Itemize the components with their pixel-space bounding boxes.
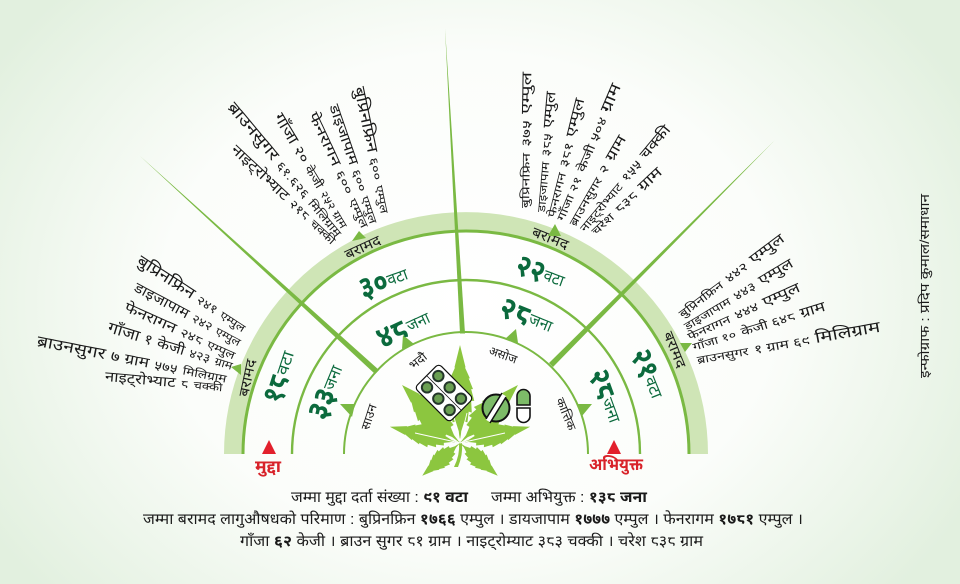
text block: upper-left seizures <box>223 85 395 249</box>
text block: upper-right seizures: ब्राउनसुगर २ ग्राम <box>564 131 630 229</box>
text block: upper-left seizures: डाइजापाम ६०० एम्पुल <box>325 101 382 226</box>
icon: round tablet <box>482 393 510 423</box>
text block: left seizures: नाइट्रोभ्याट ८ चक्की <box>104 368 224 396</box>
icon: cannabis leaf <box>387 345 533 483</box>
credit: इन्फोग्राफ : प्रदिप कुमाल/समाधान <box>917 193 933 378</box>
text block: right seizures <box>675 230 883 368</box>
value: case count 21: वटा <box>641 374 665 402</box>
text block: upper-left seizures: गाँजा २० केजी २५२ ग्राम <box>270 109 354 232</box>
value: case count 18: १८ <box>255 370 297 407</box>
value: case count 30: ३० <box>354 263 393 306</box>
spoke: left <box>140 156 379 374</box>
value: case count 21: २१ <box>623 343 667 383</box>
text block: left seizures: डाइजापाम २४२ एम्पुल <box>130 279 245 350</box>
value: accused 28 top <box>495 289 559 343</box>
outer pale band <box>224 212 708 454</box>
icon: blister pack <box>415 364 473 422</box>
value: accused 33 <box>299 359 353 424</box>
summary totals <box>143 488 803 551</box>
text block: upper-right seizures <box>516 71 675 239</box>
text block: upper-right seizures: डाइजापाम ३८५ एम्पुल <box>532 90 561 214</box>
marker: cases <box>255 440 282 477</box>
value: accused 33: जना <box>321 363 347 393</box>
value: case count 21 <box>623 343 675 404</box>
value: accused 48: ४८ <box>370 311 413 355</box>
value: accused 33: ३३ <box>299 383 343 424</box>
text block: left seizures <box>35 252 250 396</box>
label: barāmad right: बरामद <box>660 329 690 371</box>
text block: upper-right seizures: नाइट्रोभ्याट १५५ चक्की <box>575 121 675 235</box>
value: accused 28 right <box>581 364 633 428</box>
value: case count 30: वटा <box>385 266 411 289</box>
text block: right seizures: गाँजा १० केजी ६४८ ग्राम <box>690 298 828 355</box>
value: accused 28 top: २८ <box>495 289 536 333</box>
text block: upper-left seizures: ब्राउनसुगर ६१.६२६ मिलिग्राम <box>223 99 347 241</box>
value: case count 22: वटा <box>541 267 567 291</box>
marker: accused <box>589 440 644 475</box>
value: accused 48: जना <box>404 310 434 336</box>
text block: upper-left seizures: बुप्रिनफ्रिन ६०० एम्पुल <box>349 85 395 216</box>
text block: upper-right seizures: गाँजा २१ केजी ५०४ ग्राम <box>552 80 625 223</box>
value: case count 22: २२ <box>511 247 550 290</box>
panel: semicircle chart <box>140 28 775 454</box>
spoke: right <box>549 140 775 367</box>
value: case count 22 <box>511 247 571 297</box>
value: accused 28 top: जना <box>526 311 555 336</box>
value: case count 18 <box>255 345 305 407</box>
inner arc <box>344 332 588 454</box>
value: case count 30 <box>354 256 414 306</box>
text block: right seizures: ब्राउनसुगर १ ग्राम ६९ मिलिग्राम <box>695 318 883 368</box>
text block: left seizures: फेनरागन २४८ एम्पुल <box>122 298 239 363</box>
text block: upper-right seizures: चरेश ८३८ ग्राम <box>587 163 666 239</box>
text block: upper-left seizures: फेनरागन ६०० एम्पुल <box>305 109 375 231</box>
middle arc <box>292 280 640 454</box>
text block: upper-right seizures: फेनरागन ३८१ एम्पुल <box>542 96 589 219</box>
month: Asoj: असोज <box>487 343 520 367</box>
value: case count 18: वटा <box>274 349 298 378</box>
summary totals: जम्मा अभियुक्त : १३८ जना <box>491 489 648 507</box>
text block: right seizures: बुप्रिनफ्रिन ४४२ एम्पुल <box>675 230 789 322</box>
outer arc <box>243 231 689 454</box>
value: accused 28 right: जना <box>598 396 623 426</box>
text block: upper-right seizures: बुप्रिनफ्रिन ३७५ एम्पुल <box>516 71 536 208</box>
marker: cases: मुद्दा <box>255 457 282 477</box>
text block: upper-left seizures: नाइट्रोभ्याट २१८ चक्की <box>227 141 340 249</box>
month: Bhadau: भदौ <box>406 348 431 372</box>
text block: left seizures: ब्राउनसुगर ७ ग्राम ५७५ मिलिग्राम <box>35 333 229 388</box>
text block: right seizures: फेनरागन ४४४ एम्पुल <box>684 279 804 345</box>
text block: left seizures: गाँजा १ केजी ४२३ ग्राम <box>106 317 236 374</box>
month: Kattik: कात्तिक <box>553 395 580 433</box>
summary totals: जम्मा बरामद लागुऔषधको परिमाण : बुप्रिनफ्रिन १७६६ एम्पुल । डायजापाम १७७७ एम्पुल । फेनरागम १७८१ एम्पुल । <box>143 510 803 529</box>
text block: left seizures: बुप्रिनफ्रिन २४१ एम्पुल <box>133 252 250 337</box>
value: accused 48 <box>370 300 437 355</box>
marker: accused: अभियुक्त <box>589 454 644 475</box>
text block: right seizures: डाइजापाम ४४३ एम्पुल <box>679 255 797 335</box>
icon: capsule <box>517 390 530 422</box>
arrows: inner <box>340 329 592 417</box>
arrows: outer <box>231 224 692 375</box>
label: barāmad upper right: बरामद <box>530 224 572 253</box>
spoke: centre <box>445 28 465 334</box>
month: Saun: साउन <box>358 402 380 432</box>
summary totals: जम्मा मुद्दा दर्ता संख्या : ९१ वटा <box>291 488 469 507</box>
summary totals: गाँजा ६२ केजी । ब्राउन सुगर ८१ ग्राम । नाइट्रोम्याट ३८३ चक्की । चरेश ८३८ ग्राम <box>240 532 704 551</box>
value: accused 28 right: २८ <box>581 364 624 404</box>
label: barāmad upper left: बरामद <box>342 232 384 262</box>
label: barāmad left: बरामद <box>235 357 259 398</box>
